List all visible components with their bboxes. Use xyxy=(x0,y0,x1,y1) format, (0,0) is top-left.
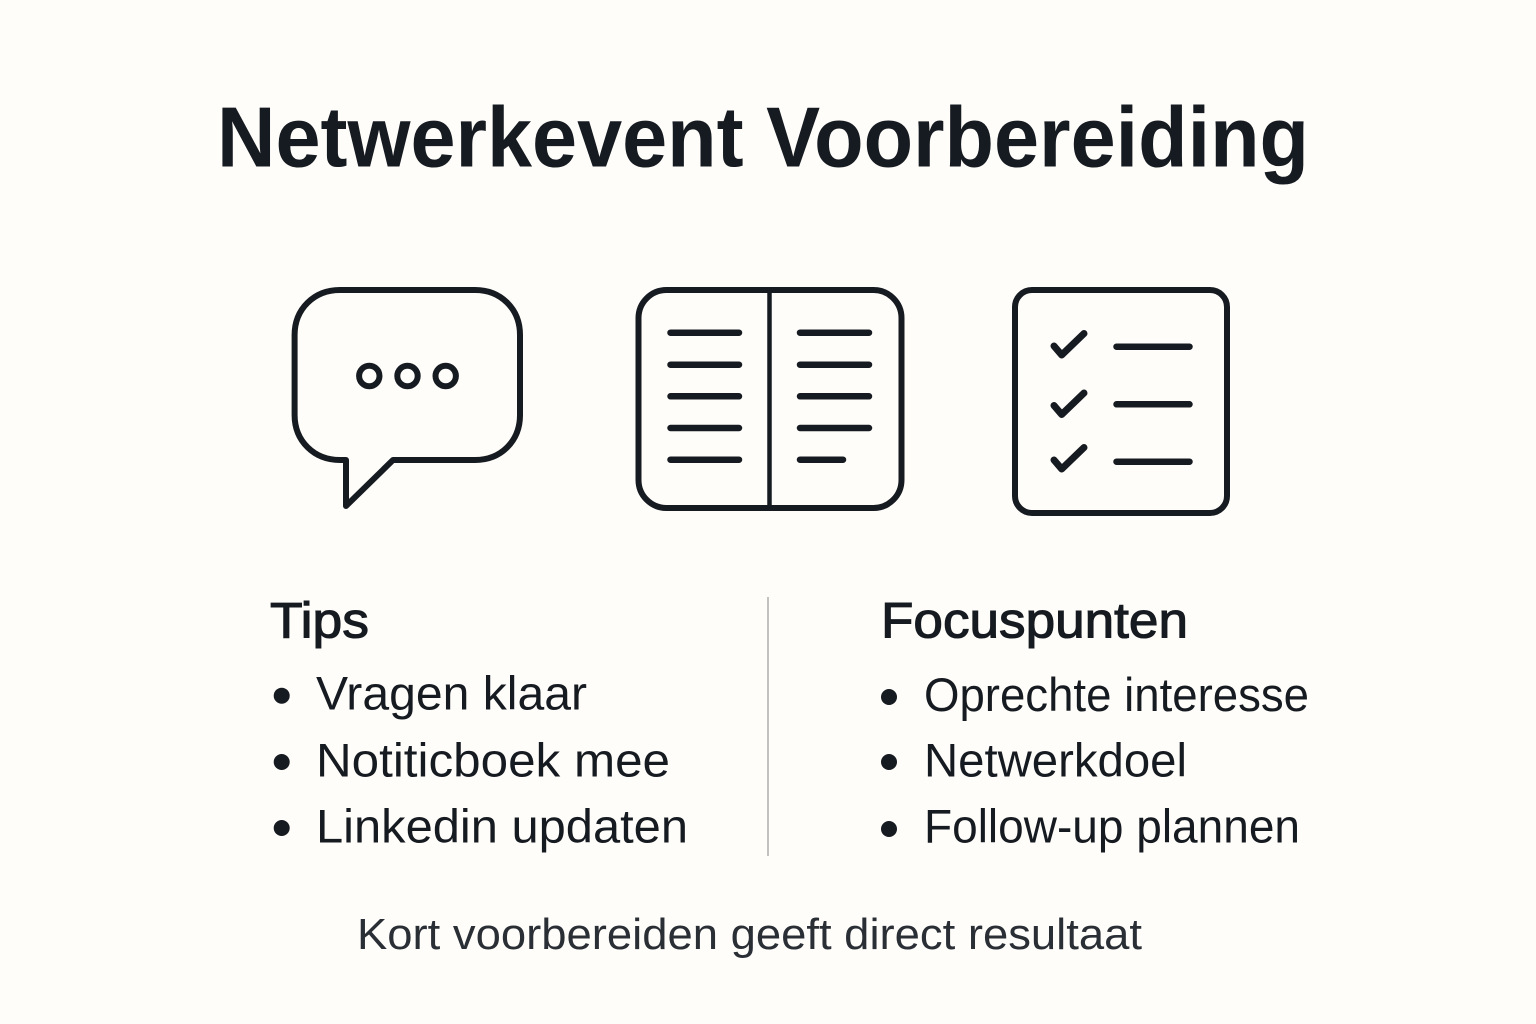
title: Netwerkevent Voorbereiding xyxy=(217,90,1309,186)
panel: focuspunten xyxy=(881,592,1309,852)
list: tips items: Vragen klaar xyxy=(316,666,587,720)
list: focuspunten items: Oprechte interesse xyxy=(924,668,1309,721)
icon: open notebook xyxy=(638,290,902,508)
list: focuspunten items xyxy=(881,668,1309,852)
list: tips items: Notiticboek mee xyxy=(316,734,670,787)
icon: checklist xyxy=(1015,290,1227,513)
footer text: Kort voorbereiden geeft direct resultaat xyxy=(357,910,1142,959)
list: tips items xyxy=(274,666,688,852)
icon: speech bubble xyxy=(295,290,520,506)
heading: tips: Tips xyxy=(270,592,369,648)
heading: focuspunten: Focuspunten xyxy=(881,592,1188,648)
list: focuspunten items: Netwerkdoel xyxy=(924,734,1187,787)
panel: tips xyxy=(270,592,688,852)
list: tips items: Linkedin updaten xyxy=(316,799,688,852)
list: focuspunten items: Follow-up plannen xyxy=(924,799,1300,852)
